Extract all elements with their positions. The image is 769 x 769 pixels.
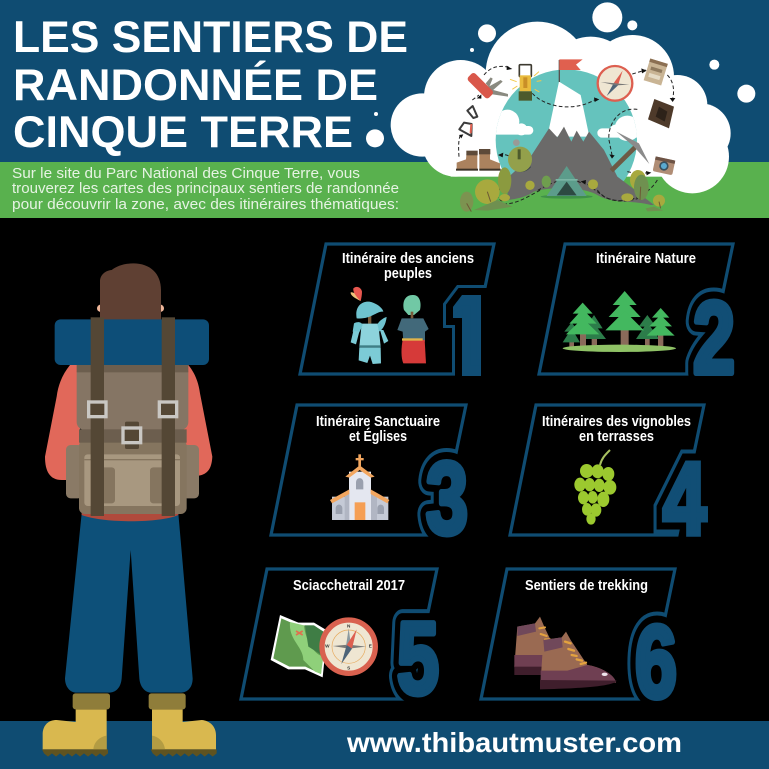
number shape bbox=[453, 295, 481, 376]
number 3: 3 bbox=[426, 443, 468, 556]
number 2: 2 bbox=[693, 282, 735, 396]
heading bbox=[342, 250, 474, 282]
sky disc bbox=[496, 69, 637, 211]
number halo gap: 2 bbox=[693, 282, 735, 396]
heading: peuples bbox=[384, 265, 432, 282]
heading bbox=[542, 413, 691, 445]
number halo gap: 5 bbox=[397, 603, 439, 716]
title: LES SENTIERS DE bbox=[13, 13, 408, 62]
number halo: 4 bbox=[663, 443, 706, 557]
icon: church bbox=[330, 454, 389, 520]
icon: trees bbox=[563, 291, 676, 352]
number halo: 3 bbox=[426, 443, 468, 556]
mountain bbox=[507, 127, 654, 205]
panel 3: sanctuaries and churches bbox=[269, 403, 468, 538]
flag bbox=[559, 59, 583, 82]
bubbles bbox=[366, 2, 755, 147]
footer band bbox=[0, 721, 769, 769]
buckles bbox=[89, 402, 177, 443]
icon: map and compass bbox=[271, 615, 375, 677]
icon: grapes bbox=[574, 450, 616, 525]
hiker figure bbox=[42, 263, 217, 757]
heading: Itinéraire Nature bbox=[596, 250, 696, 267]
panel 6: trekking bbox=[479, 567, 677, 701]
shirt bbox=[45, 365, 212, 480]
illustration: mountain and hiking gear cloud bbox=[366, 2, 755, 213]
torso and backpack bbox=[45, 263, 212, 521]
heading: en terrasses bbox=[579, 428, 654, 445]
number halo gap bbox=[453, 295, 481, 376]
title: CINQUE TERRE bbox=[13, 108, 353, 157]
trail map bbox=[648, 99, 674, 128]
hiking boots bbox=[456, 149, 501, 171]
dashed trail bbox=[459, 66, 674, 203]
icon: armours bbox=[351, 287, 429, 364]
heading: Itinéraire des anciens bbox=[342, 250, 474, 267]
heading: et Églises bbox=[349, 428, 407, 445]
trees and bushes bbox=[460, 167, 665, 212]
intro text: Sur le site du Parc National des Cinque Terre, vous bbox=[12, 166, 360, 182]
grassy foreground bbox=[481, 188, 664, 213]
camera bbox=[653, 156, 675, 175]
icon: map and compass: W bbox=[325, 644, 330, 649]
heading: Itinéraires des vignobles bbox=[542, 413, 691, 430]
notebook bbox=[644, 59, 668, 86]
heading bbox=[316, 413, 440, 445]
lantern bbox=[510, 65, 541, 101]
icon: map and compass: N bbox=[347, 624, 351, 629]
number halo: 2 bbox=[693, 282, 735, 396]
heading: Itinéraire Sanctuaire bbox=[316, 413, 440, 430]
icon: map and compass: S bbox=[347, 666, 350, 671]
title: RANDONNÉE DE bbox=[13, 60, 378, 110]
ice axe bbox=[611, 132, 649, 171]
side pockets bbox=[66, 445, 83, 498]
trail over grass bbox=[497, 190, 644, 204]
title bbox=[13, 13, 408, 157]
sleeping roll bbox=[55, 319, 209, 365]
heading: Sciacchetrail 2017 bbox=[293, 577, 405, 594]
intro text bbox=[12, 166, 399, 213]
number halo bbox=[453, 295, 481, 376]
number halo: 5 bbox=[397, 603, 439, 716]
panel 4: terraced vineyards bbox=[510, 405, 706, 557]
heading: Sentiers de trekking bbox=[525, 577, 648, 594]
number 6: 6 bbox=[635, 606, 677, 720]
trousers bbox=[65, 513, 193, 693]
website address: www.thibautmuster.com bbox=[346, 727, 682, 758]
tent bbox=[541, 166, 593, 199]
panel 1: ancient peoples bbox=[300, 244, 494, 395]
panel 2: nature bbox=[537, 242, 735, 376]
cloud bbox=[391, 22, 731, 193]
header band bbox=[0, 0, 769, 162]
panel 5: Sciacchetrail bbox=[241, 569, 439, 716]
number 5: 5 bbox=[397, 603, 439, 716]
small clouds bbox=[492, 110, 641, 141]
carabiners bbox=[459, 106, 477, 136]
snowy peak bbox=[547, 82, 589, 137]
swiss knife bbox=[466, 72, 508, 100]
canteen bbox=[508, 139, 532, 172]
number halo gap: 3 bbox=[426, 443, 468, 556]
trousers and boots bbox=[42, 513, 217, 757]
number halo: 6 bbox=[635, 606, 677, 720]
number 4: 4 bbox=[663, 443, 706, 557]
arrowheads bbox=[459, 66, 675, 185]
boots bbox=[42, 709, 217, 757]
straps bbox=[91, 317, 104, 516]
hair bbox=[100, 263, 161, 320]
icon: trekking boots bbox=[514, 617, 617, 689]
number halo gap: 4 bbox=[663, 443, 706, 557]
number halo gap: 6 bbox=[635, 606, 677, 720]
intro text: pour découvrir la zone, avec des itinéraires thématiques: bbox=[12, 197, 399, 213]
icon: map and compass: E bbox=[369, 644, 372, 649]
ears bbox=[97, 305, 104, 312]
cuffs bbox=[73, 693, 110, 709]
intro text: trouverez les cartes des principaux sentiers de randonnée bbox=[12, 181, 399, 197]
compass bbox=[598, 66, 632, 101]
pack body bbox=[77, 365, 188, 430]
green subtitle band bbox=[0, 162, 769, 218]
number 1: 1 bbox=[436, 281, 493, 395]
